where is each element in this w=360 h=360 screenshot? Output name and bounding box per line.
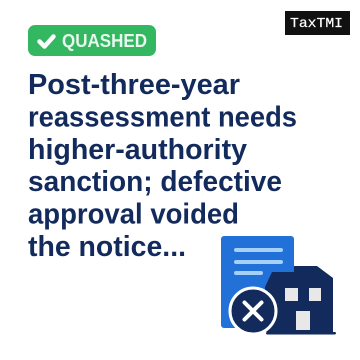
icon: blue document [221, 236, 294, 328]
title [28, 69, 297, 263]
status badge: quashed [28, 25, 156, 56]
title: Post-three-year [28, 69, 240, 101]
status badge: quashed: QUASHED [62, 31, 147, 51]
brand tag: TaxTMI: TaxTMI [290, 16, 343, 32]
title: sanction; defective [28, 166, 282, 198]
title: reassessment needs [28, 102, 297, 134]
title: approval voided [28, 198, 239, 230]
icon: document with building and rejected mark [221, 236, 336, 334]
icon: building [265, 266, 336, 334]
title: the notice... [28, 231, 186, 263]
title: higher-authority [28, 134, 247, 166]
brand tag: TaxTMI [285, 11, 350, 35]
icon: rejected cross circle [230, 288, 276, 334]
